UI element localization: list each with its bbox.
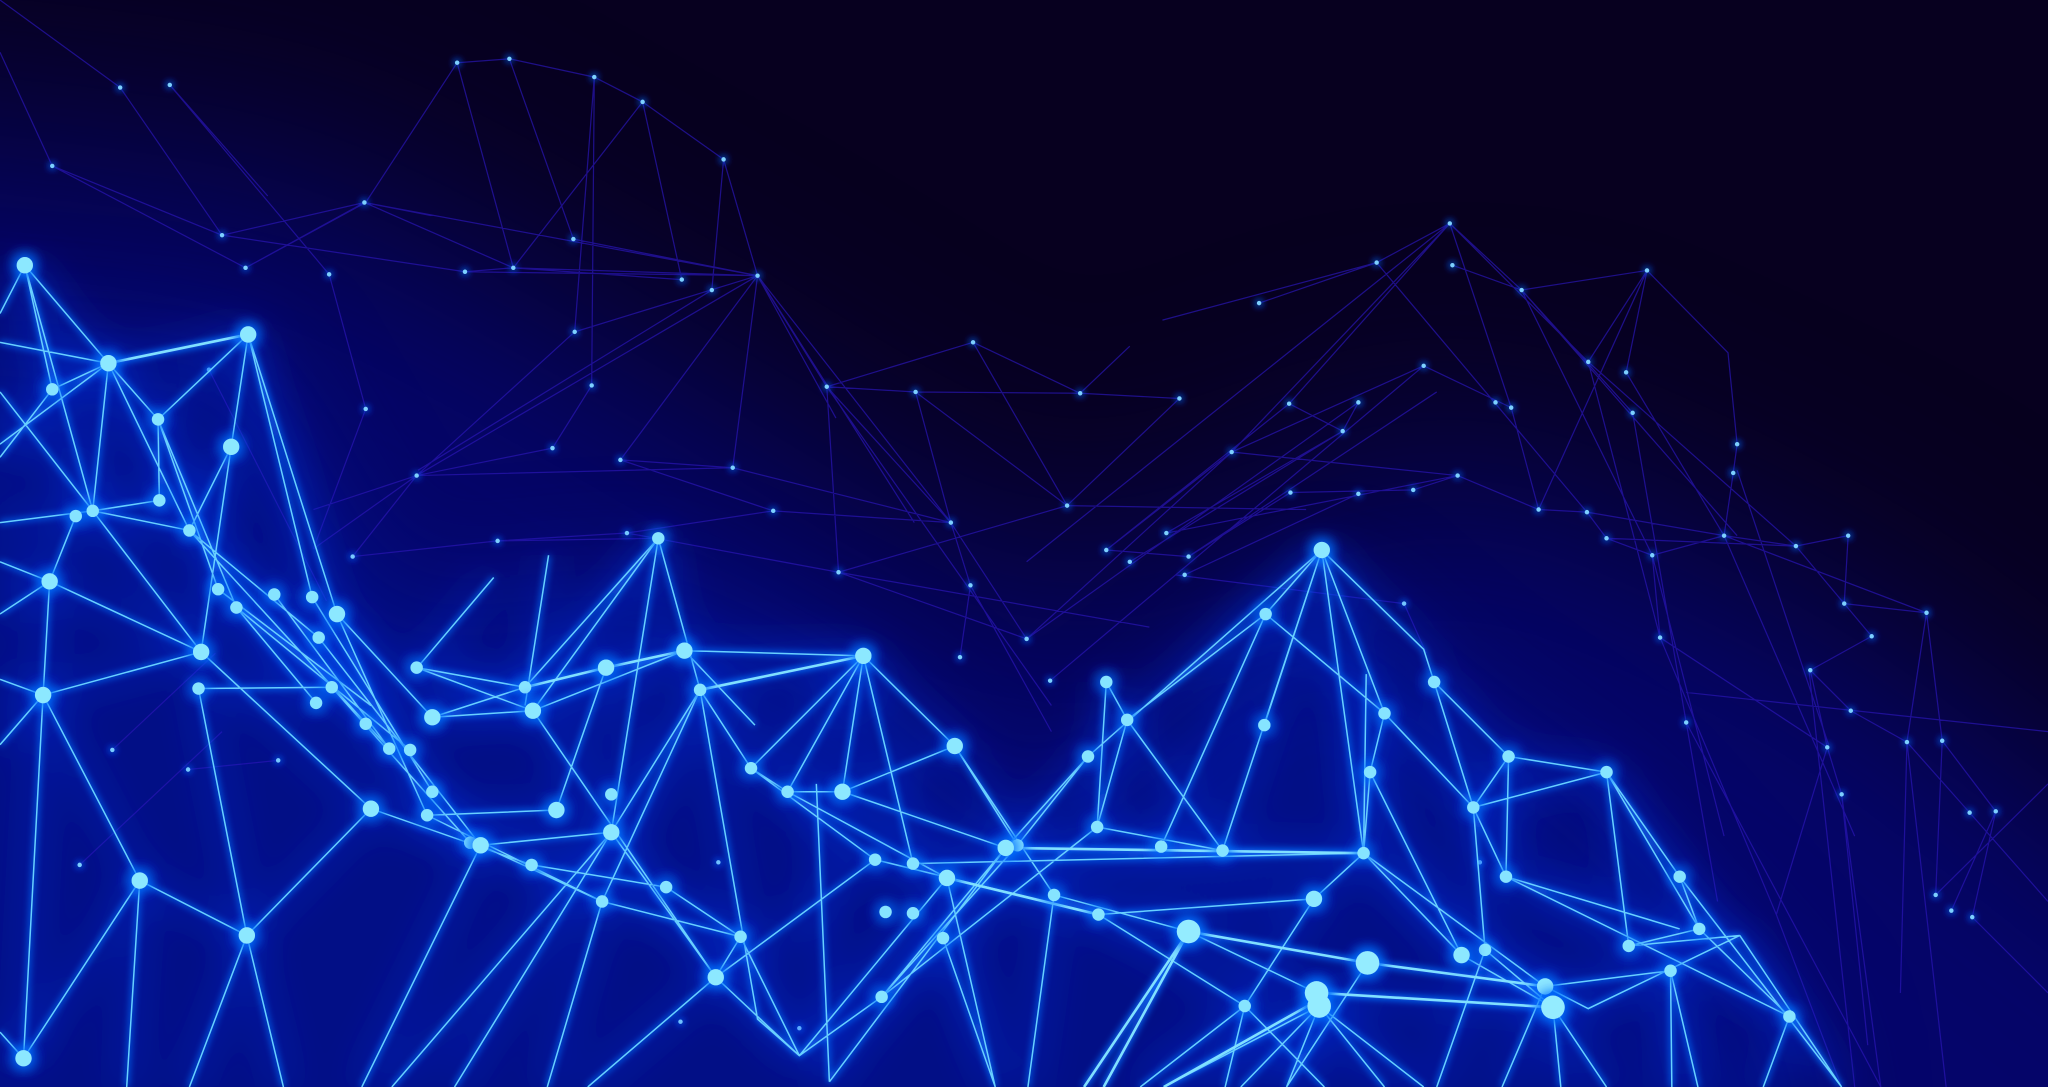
near nodes small xyxy=(52,389,1789,1016)
near nodes hero xyxy=(1189,932,1553,1007)
near edges wide halo xyxy=(0,265,1842,1087)
near nodes large xyxy=(24,265,1545,1058)
near edges glow xyxy=(0,265,1842,1087)
network: bright near layer xyxy=(0,265,1842,1087)
near edges core xyxy=(0,265,1842,1087)
